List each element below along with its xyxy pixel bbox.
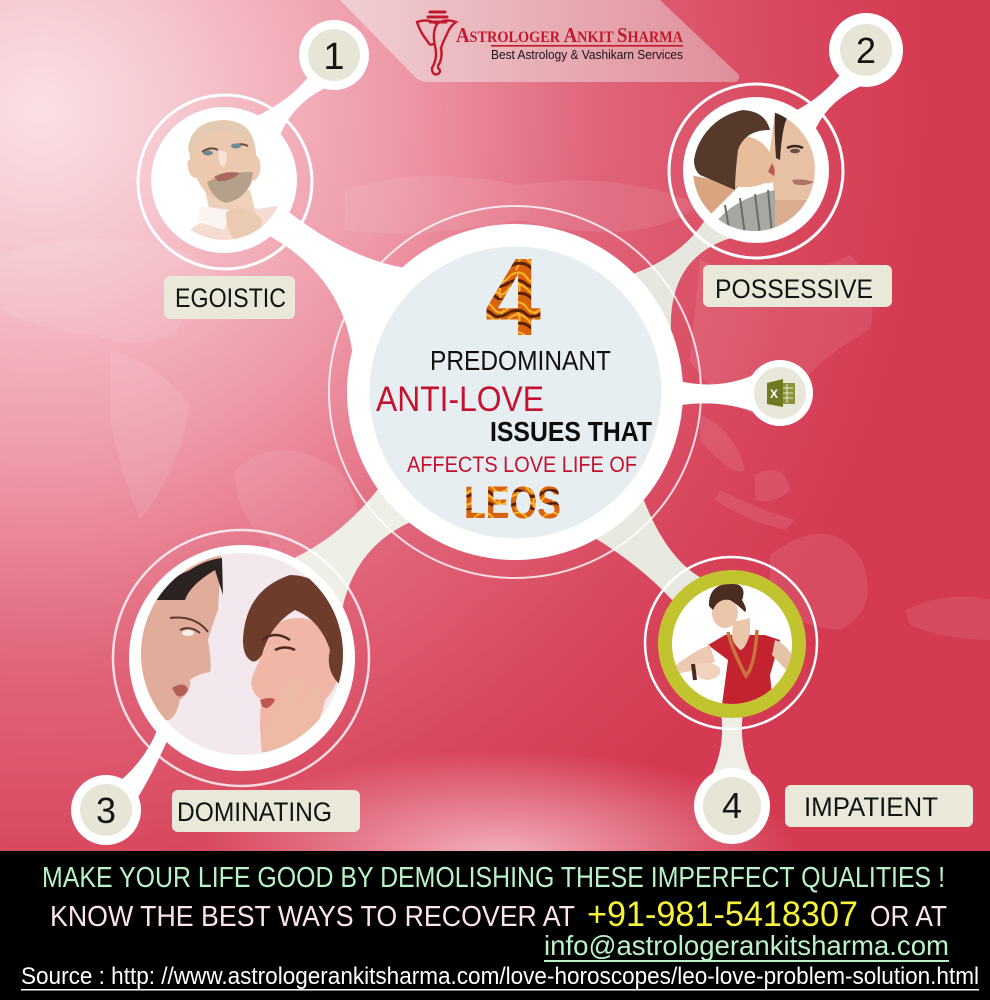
hub: centre title xyxy=(329,206,701,578)
panel: impatient xyxy=(645,557,817,729)
panel: dominating xyxy=(113,530,369,786)
footer line 2 end: OR AT xyxy=(870,901,947,933)
connector: centre to circle 4 xyxy=(590,490,705,600)
heading line: affects love life of: AFFECTS LOVE LIFE OF xyxy=(407,452,637,477)
icon: ganesha logo xyxy=(417,12,456,74)
photo: man with hand on chin xyxy=(187,120,278,240)
connector: circle 2 to number 2 xyxy=(793,70,866,130)
label: impatient xyxy=(785,785,973,827)
label: impatient: IMPATIENT xyxy=(804,792,938,822)
logo tagline: Best Astrology & Vashikarn Services xyxy=(491,48,683,62)
footer email: info@astrologerankitsharma.com xyxy=(544,930,949,961)
label: egoistic xyxy=(164,276,295,319)
white photo disc xyxy=(672,584,792,704)
photo: woman checking watch xyxy=(672,583,795,705)
number 3 badge xyxy=(71,775,141,845)
world map backdrop xyxy=(0,176,990,650)
connector: centre to circle 1 xyxy=(262,205,405,350)
connectors between hubs xyxy=(114,70,866,804)
banner shape xyxy=(340,0,739,82)
number 4 badge xyxy=(694,768,770,844)
heading line: anti-love: ANTI-LOVE xyxy=(376,380,544,419)
photo: couple kissing cheek xyxy=(693,110,815,231)
heading line: leos: LEOS xyxy=(464,477,561,528)
excel icon badge xyxy=(747,360,813,426)
footer background xyxy=(0,851,990,1000)
number 3 badge: 3 xyxy=(96,790,116,831)
heading line: issues that: ISSUES THAT xyxy=(490,416,652,447)
connector: circle 4 to number 4 xyxy=(709,712,755,780)
panel: possessive xyxy=(669,84,843,258)
logo rule xyxy=(491,45,683,47)
footer panel xyxy=(0,851,990,1000)
inner disc xyxy=(370,246,662,538)
connector: centre to circle 3 xyxy=(290,480,415,610)
white frame xyxy=(151,107,297,253)
logo title: ASTROLOGER ANKIT SHARMA xyxy=(456,23,683,47)
panel: egoistic xyxy=(138,95,312,269)
ring xyxy=(138,95,312,269)
ring xyxy=(113,530,369,786)
connector: circle 1 to number 1 xyxy=(253,72,332,135)
icon: spreadsheet: X xyxy=(770,387,778,401)
heading number 4: 4 xyxy=(485,236,541,359)
heading line: predominant: PREDOMINANT xyxy=(430,345,611,376)
olive frame xyxy=(658,570,806,718)
label: possessive xyxy=(703,265,892,307)
number 2 badge xyxy=(829,13,903,87)
label: dominating xyxy=(172,790,360,832)
label: dominating: DOMINATING xyxy=(177,797,332,827)
white frame xyxy=(683,97,829,243)
logo banner xyxy=(340,0,739,82)
label: egoistic: EGOISTIC xyxy=(175,283,286,313)
number 1 badge: 1 xyxy=(323,36,345,78)
footer phone number: +91-981-5418307 xyxy=(587,895,858,934)
connector: circle 3 to number 3 xyxy=(114,728,170,804)
connector: centre to circle 2 xyxy=(630,220,738,345)
white ring xyxy=(347,224,683,560)
number 1 badge xyxy=(299,20,369,90)
label: possessive: POSSESSIVE xyxy=(715,274,873,304)
white frame xyxy=(129,545,355,771)
connector: centre to excel icon xyxy=(675,372,760,414)
outer thin ring xyxy=(329,206,701,578)
number 4 badge: 4 xyxy=(722,785,742,826)
footer line 2: KNOW THE BEST WAYS TO RECOVER AT xyxy=(50,901,575,933)
ring xyxy=(669,84,843,258)
ring xyxy=(645,557,817,729)
number 2 badge: 2 xyxy=(856,30,876,71)
badge frame xyxy=(747,360,813,426)
photo: couple arguing xyxy=(140,540,345,757)
badge disc xyxy=(754,367,806,419)
